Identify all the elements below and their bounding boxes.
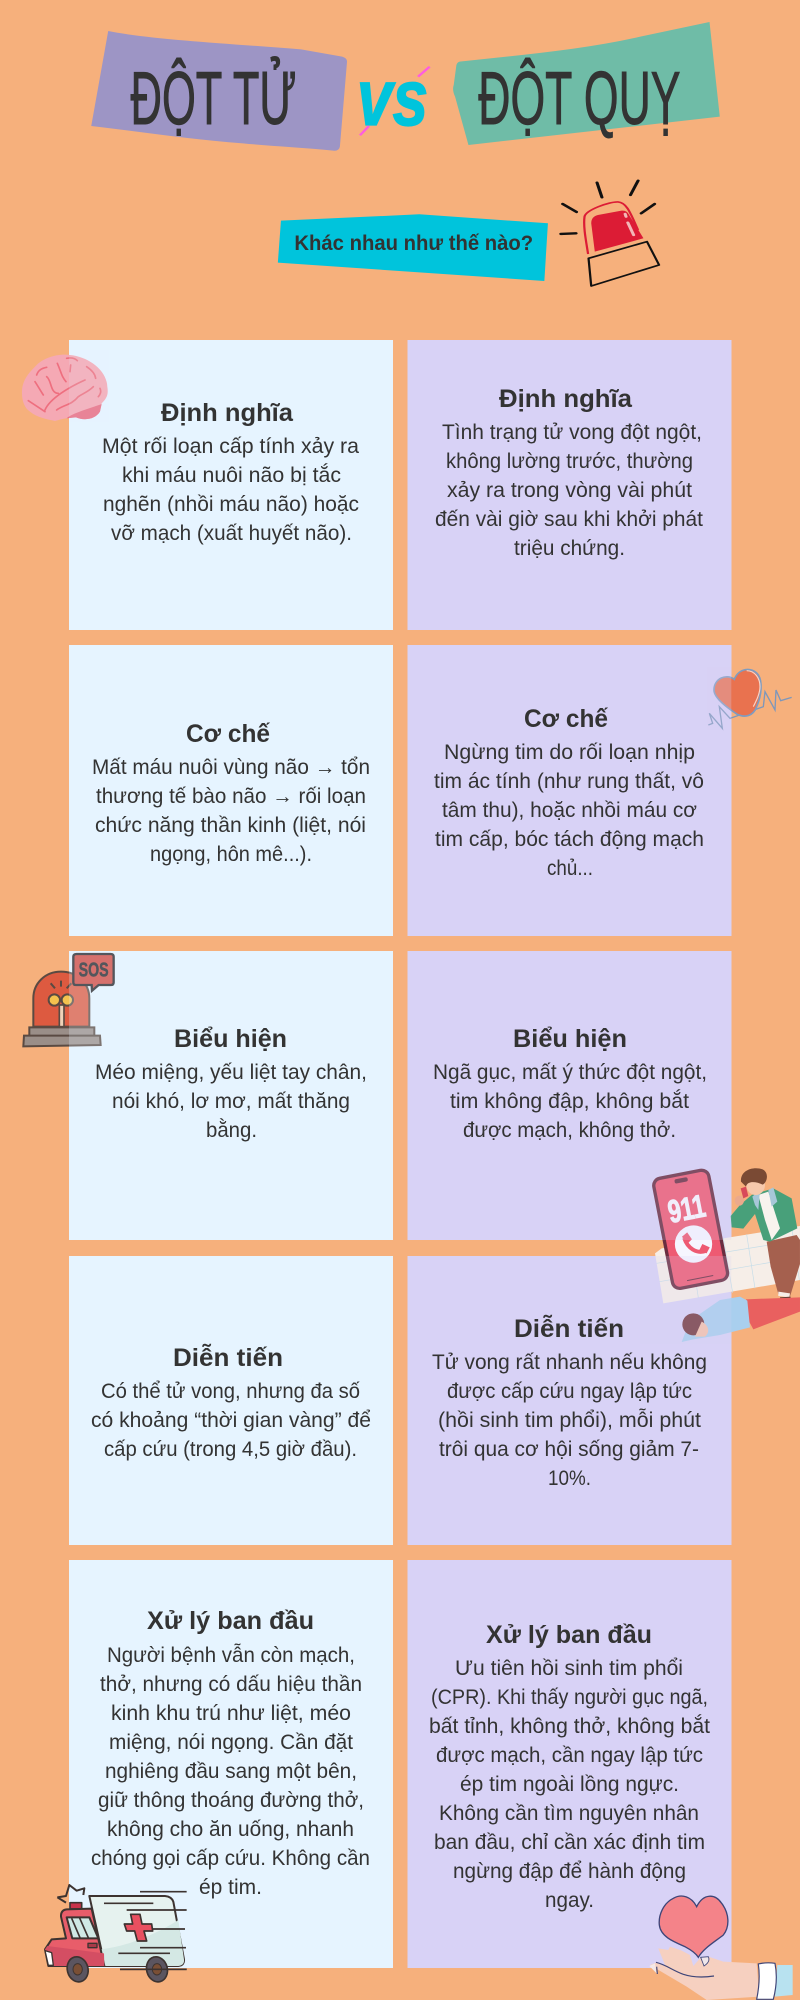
heading: Diễn tiến bbox=[514, 1313, 624, 1343]
heading: Định nghĩa bbox=[499, 385, 633, 413]
title: đột tử bbox=[91, 31, 347, 151]
collapsed man bbox=[682, 1297, 800, 1342]
body text: nghẽn (nhồi máu não) hoặc bbox=[103, 493, 359, 516]
body text: ngay. bbox=[545, 1889, 594, 1912]
panel: định nghĩa, đột quỵ bbox=[69, 340, 393, 630]
body text bbox=[434, 741, 704, 880]
vs mark: vs bbox=[357, 53, 428, 143]
speech bubble: SOS bbox=[79, 960, 109, 982]
red cross bbox=[124, 1914, 153, 1941]
panel: biểu hiện, đột tử bbox=[408, 951, 732, 1240]
heading: Xử lý ban đầu bbox=[486, 1621, 652, 1649]
body text: nghiêng đầu sang một bên, bbox=[105, 1760, 357, 1783]
body text: ngừng đập để hành động bbox=[453, 1860, 686, 1883]
body text: có khoảng “thời gian vàng” để bbox=[91, 1409, 371, 1432]
body text: ép tim. bbox=[199, 1876, 262, 1899]
panel: biểu hiện, đột quỵ bbox=[69, 951, 393, 1240]
body text: ép tim ngoài lồng ngực. bbox=[460, 1773, 679, 1796]
vs mark bbox=[357, 53, 430, 143]
body text: bằng. bbox=[206, 1119, 257, 1142]
body text: chóng gọi cấp cứu. Không cần bbox=[91, 1847, 370, 1870]
body text: (hồi sinh tim phổi), mỗi phút bbox=[438, 1409, 701, 1432]
title block bbox=[91, 22, 720, 151]
body text: bất tỉnh, không thở, không bắt bbox=[429, 1715, 710, 1738]
body text: 10%. bbox=[548, 1467, 591, 1490]
body text: đến vài giờ sau khi khởi phát bbox=[435, 508, 703, 531]
icon: SOS siren bbox=[23, 954, 114, 1047]
speed lines bbox=[104, 1892, 187, 1969]
icon: red siren bbox=[561, 181, 659, 286]
heading: Diễn tiến bbox=[173, 1342, 283, 1372]
body text: chức năng thần kinh (liệt, nói bbox=[95, 814, 366, 837]
body text: kinh khu trú như liệt, méo bbox=[111, 1702, 351, 1725]
body text bbox=[432, 1351, 707, 1490]
panel: diễn tiến, đột quỵ bbox=[69, 1256, 393, 1545]
phone: 911 bbox=[665, 1187, 708, 1230]
body text: (CPR). Khi thấy người gục ngã, bbox=[431, 1686, 708, 1709]
body text: thở, nhưng có dấu hiệu thần bbox=[100, 1673, 362, 1696]
panel: xử lý ban đầu, đột tử bbox=[408, 1560, 732, 1968]
standing man bbox=[731, 1168, 800, 1301]
body text: Ngừng tim do rối loạn nhịp bbox=[444, 741, 695, 764]
body text: tim cấp, bóc tách động mạch bbox=[435, 828, 704, 851]
phone bbox=[652, 1169, 729, 1290]
body text: Méo miệng, yếu liệt tay chân, bbox=[95, 1061, 367, 1084]
body text: trôi qua cơ hội sống giảm 7- bbox=[439, 1438, 699, 1461]
body text: thương tế bào não → rối loạn bbox=[96, 785, 366, 808]
body text: nói khó, lơ mơ, mất thăng bbox=[112, 1090, 350, 1113]
body text: Một rối loạn cấp tính xảy ra bbox=[102, 435, 359, 458]
body text: Ngã gục, mất ý thức đột ngột, bbox=[433, 1061, 707, 1084]
heading: Cơ chế bbox=[186, 720, 270, 748]
body text: được cấp cứu ngay lập tức bbox=[447, 1380, 692, 1403]
body text bbox=[95, 1061, 367, 1142]
body text: cấp cứu (trong 4,5 giờ đầu). bbox=[104, 1438, 357, 1461]
body text: Không cần tìm nguyên nhân bbox=[439, 1802, 699, 1825]
title: đột tử: ĐỘT TỬ bbox=[131, 55, 297, 140]
body text: vỡ mạch (xuất huyết não). bbox=[111, 522, 352, 545]
body text bbox=[91, 1380, 371, 1461]
panel: định nghĩa, đột tử bbox=[408, 340, 732, 630]
body text bbox=[429, 1657, 710, 1912]
body text: Ưu tiên hồi sinh tim phổi bbox=[455, 1657, 683, 1680]
heading: Xử lý ban đầu bbox=[147, 1607, 314, 1635]
body text: Có thể tử vong, nhưng đa số bbox=[101, 1380, 360, 1403]
body text: giữ thông thoáng đường thở, bbox=[98, 1789, 364, 1812]
body text: tim ác tính (như rung thất, vô bbox=[434, 770, 704, 793]
subtitle banner bbox=[278, 214, 548, 281]
subtitle banner: Khác nhau như thế nào? bbox=[294, 231, 533, 255]
body text: triệu chứng. bbox=[514, 537, 625, 560]
icon: hand holding heart bbox=[649, 1896, 793, 2000]
title: đột quỵ bbox=[453, 22, 720, 145]
body text: miệng, nói ngọng. Cần đặt bbox=[109, 1731, 353, 1754]
body text bbox=[91, 1644, 370, 1899]
body text: không lường trước, thường bbox=[446, 450, 693, 473]
panel: cơ chế, đột tử bbox=[408, 645, 732, 936]
body text bbox=[435, 421, 703, 560]
panel: diễn tiến, đột tử bbox=[408, 1256, 732, 1545]
body text bbox=[433, 1061, 707, 1142]
body text: được mạch, cần ngay lập tức bbox=[436, 1744, 703, 1767]
body text: Mất máu nuôi vùng não → tổn bbox=[92, 756, 370, 779]
body text: Tình trạng tử vong đột ngột, bbox=[442, 421, 702, 444]
panel: cơ chế, đột quỵ bbox=[69, 645, 393, 936]
body text: chủ... bbox=[547, 857, 593, 880]
body text: xảy ra trong vòng vài phút bbox=[447, 479, 692, 502]
icon: heart with pulse line bbox=[707, 667, 792, 730]
body text: không cho ăn uống, nhanh bbox=[107, 1818, 354, 1841]
heading: Cơ chế bbox=[524, 705, 608, 733]
body text: được mạch, không thở. bbox=[463, 1119, 676, 1142]
body text: Tử vong rất nhanh nếu không bbox=[432, 1351, 707, 1374]
heading: Biểu hiện bbox=[174, 1025, 287, 1053]
body text bbox=[92, 756, 370, 866]
body text bbox=[102, 435, 359, 545]
heading: Định nghĩa bbox=[161, 399, 294, 427]
heading: Biểu hiện bbox=[513, 1025, 627, 1053]
body text: tâm thu), hoặc nhồi máu cơ bbox=[442, 799, 697, 822]
icon: ambulance bbox=[45, 1885, 187, 1984]
illustration: phone 911 with bystander and collapsed man bbox=[640, 1160, 800, 1344]
body text: tim không đập, không bắt bbox=[450, 1090, 689, 1113]
panel: xử lý ban đầu, đột quỵ bbox=[69, 1560, 393, 1968]
icon: brain bbox=[22, 350, 109, 422]
floor grid bbox=[655, 1226, 800, 1303]
body text: ban đầu, chỉ cần xác định tim bbox=[434, 1831, 705, 1854]
body text: Người bệnh vẫn còn mạch, bbox=[107, 1644, 355, 1667]
body text: ngọng, hôn mê...). bbox=[150, 843, 312, 866]
body text: khi máu nuôi não bị tắc bbox=[122, 464, 341, 487]
